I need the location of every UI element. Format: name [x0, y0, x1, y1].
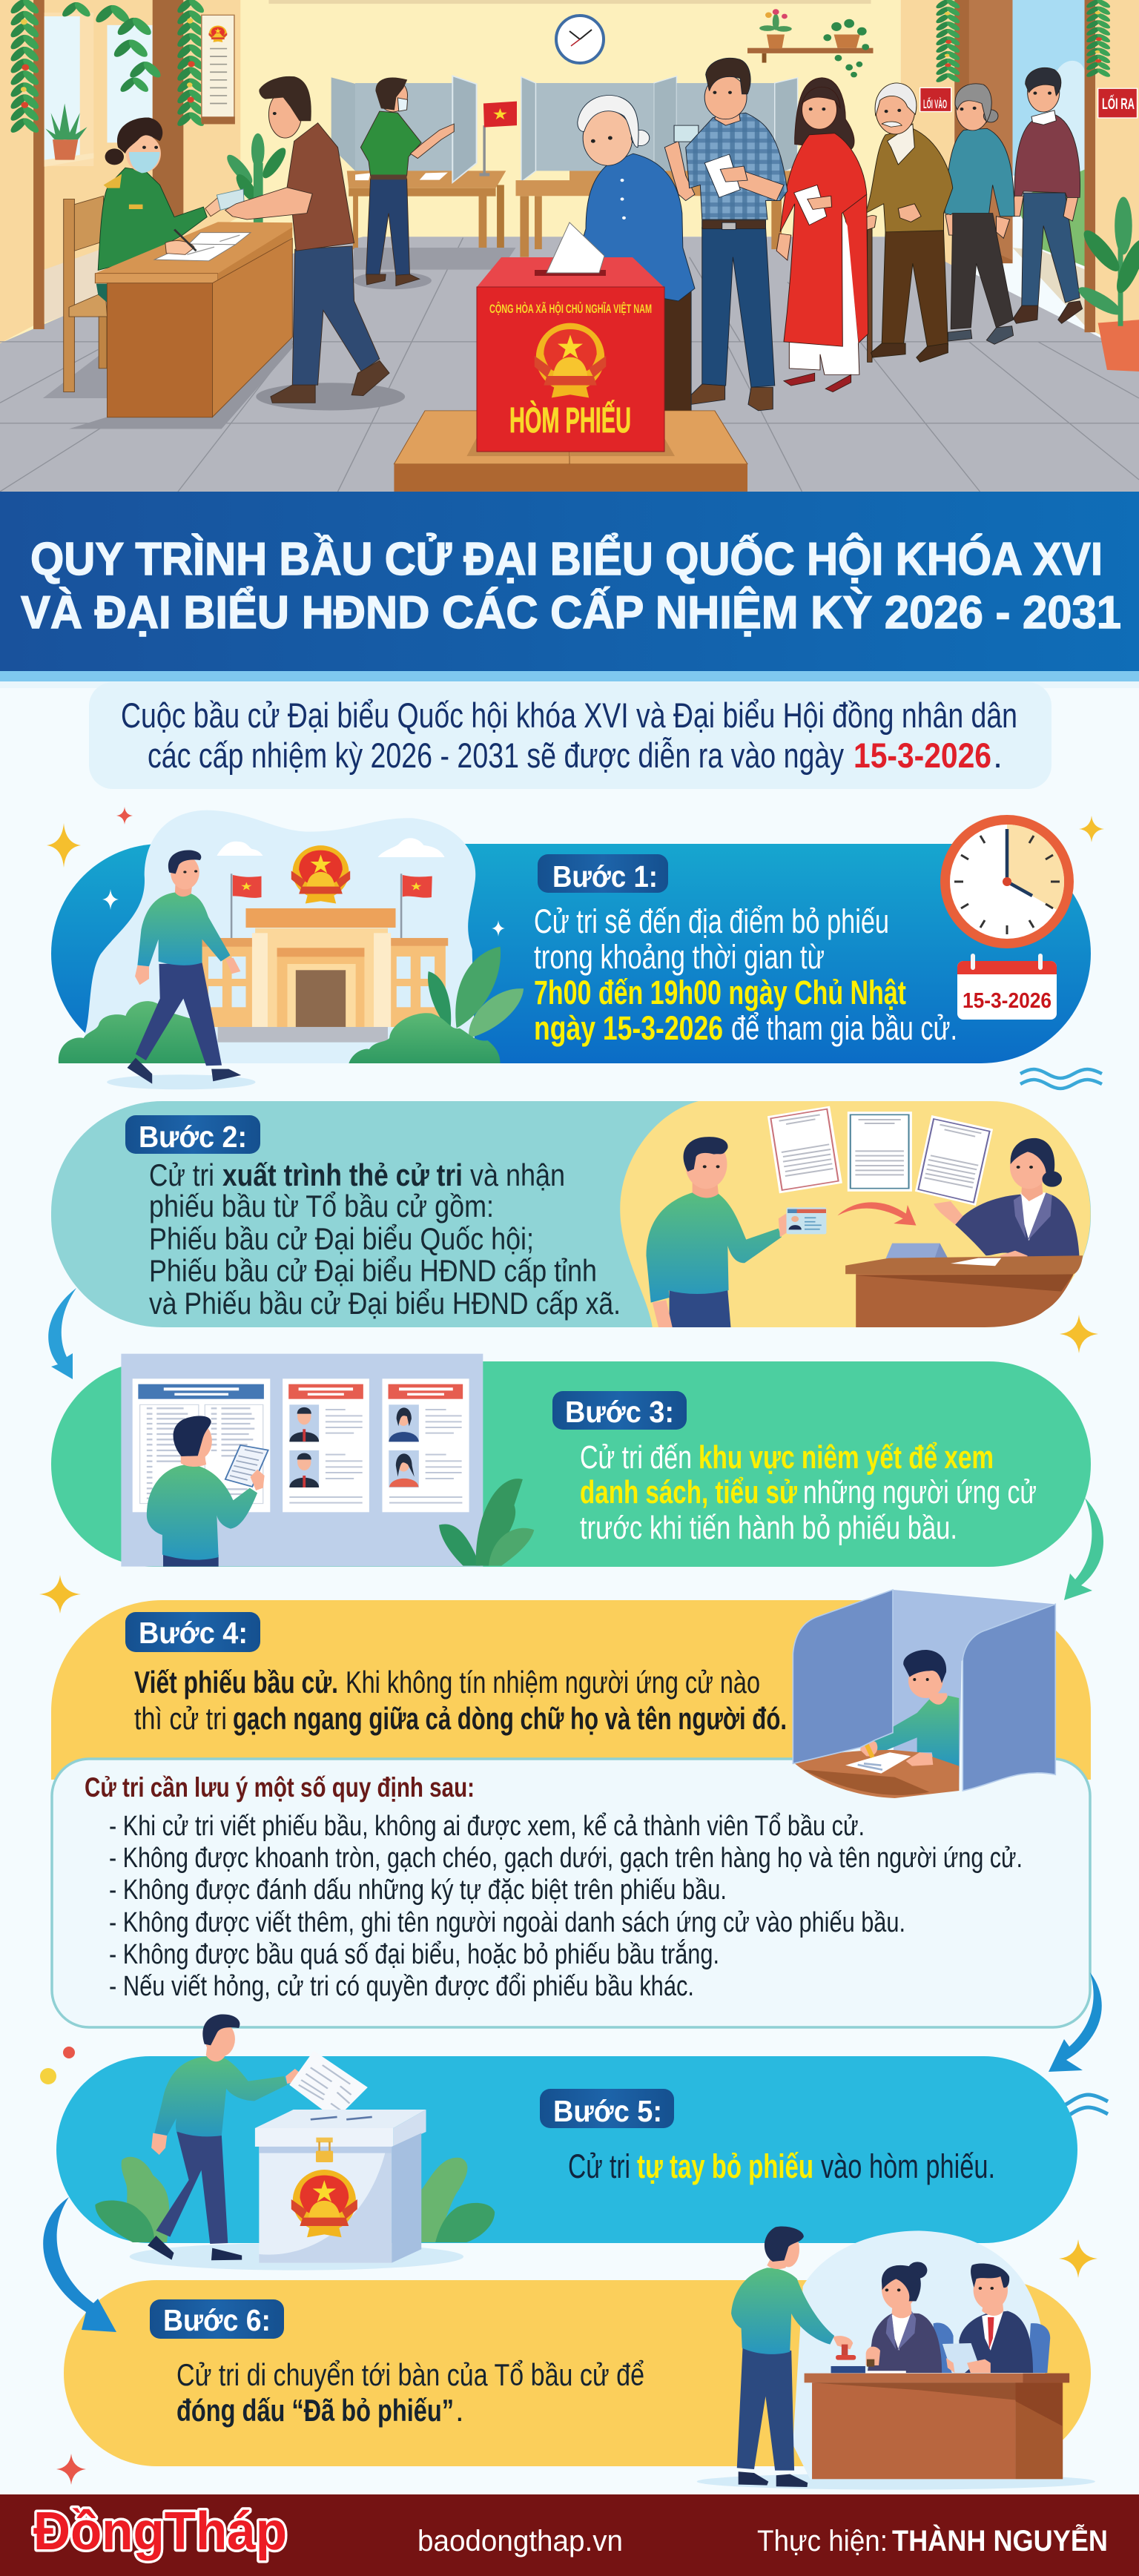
step 1 text — [534, 902, 957, 1047]
notes heading: Cử tri cần lưu ý một số quy định sau: — [85, 1772, 475, 1803]
website: baodongthap.vn — [417, 2525, 623, 2557]
scene right: queue of voters, door and signs — [570, 0, 1139, 492]
step 1 text: Cử tri sẽ đến địa điểm bỏ phiếu — [534, 902, 889, 940]
step 4 text: Viết phiếu bầu cử. — [134, 1665, 338, 1700]
step 3 text: khu vực niêm yết để xem — [699, 1439, 994, 1476]
step 3 text: những người ứng cử — [803, 1474, 1037, 1510]
logo: Dong Thap: ĐồngTháp — [33, 2502, 287, 2561]
arrow: step 4 to step 5 — [1049, 1972, 1102, 2072]
step 1 text: 7h00 đến 19h00 ngày Chủ Nhật — [534, 974, 906, 1011]
step 2 text: Phiếu bầu cử Đại biểu HĐND cấp tỉnh — [149, 1253, 597, 1288]
illustration: voter in booth — [793, 1590, 1055, 1799]
step 4 text: thì cử tri — [134, 1701, 227, 1736]
illustration: voter walking to the polling station — [59, 810, 524, 1089]
notes list: - Không được đánh dấu những ký tự đặc biệt trên phiếu bầu. — [109, 1875, 727, 1906]
step 2 text: phiếu bầu từ Tổ bầu cử gồm: — [149, 1189, 494, 1223]
step 6 text: Cử tri di chuyển tới bàn của Tổ bầu cử để — [176, 2357, 644, 2392]
step 3 text: Cử tri đến — [580, 1439, 692, 1476]
panel: step 6 — [64, 2226, 1095, 2490]
illustration: polling station scene: LỐI VÀO — [923, 96, 947, 111]
panel: step 4 — [51, 1590, 1091, 2027]
step 3 text — [580, 1439, 1037, 1546]
illustration: voter casting ballot — [95, 2014, 495, 2270]
scene: red ballot box: CỘNG HÒA XÃ HỘI CHỦ NGHĨA VIỆT NAM — [489, 301, 652, 316]
step 2 text: Phiếu bầu cử Đại biểu Quốc hội; — [149, 1221, 534, 1256]
arrow: step 2 to step 3 — [48, 1288, 76, 1379]
credit: Thực hiện: — [757, 2525, 888, 2557]
step 5 badge: Bước 5: — [553, 2094, 662, 2128]
step 6 text: . — [455, 2393, 464, 2428]
scene: red ballot box: HÒM PHIẾU — [509, 400, 631, 440]
arrow: step 5 to step 6 — [43, 2197, 116, 2332]
scene: red ballot box — [477, 222, 664, 452]
step 1 badge: Bước 1: — [552, 859, 658, 894]
footer — [0, 2494, 1139, 2576]
step 1 text: để tham gia bầu cử. — [731, 1009, 957, 1047]
decorative sparkles — [39, 807, 1108, 2485]
step 5 text — [568, 2147, 995, 2185]
icon: clock — [940, 815, 1074, 948]
icon: calendar — [957, 954, 1057, 1020]
step 5 text: vào hòm phiếu. — [821, 2147, 995, 2185]
panel: step 1 — [51, 810, 1091, 1089]
illustration: stamping the ballot card — [697, 2226, 1095, 2490]
step 3 text: danh sách, tiểu sử — [580, 1474, 797, 1510]
step 2 text: và nhận — [470, 1157, 565, 1192]
step 2 text — [149, 1157, 621, 1321]
step 1 text: ngày 15-3-2026 — [534, 1009, 723, 1047]
icon: calendar: 15-3-2026 — [963, 989, 1051, 1013]
notes list: - Không được viết thêm, ghi tên người ngoài danh sách ứng cử vào phiếu bầu. — [109, 1907, 905, 1938]
arrow: step 3 to step 4 — [1064, 1498, 1103, 1600]
panel: step 5 — [56, 2014, 1077, 2270]
panel: step 2 — [51, 1101, 1091, 1327]
illustration: voter reading candidate lists — [121, 1354, 534, 1567]
heading line 2: VÀ ĐẠI BIỂU HĐND CÁC CẤP NHIỆM KỲ 2026 - 2031 — [21, 587, 1121, 638]
title banner — [0, 492, 1139, 688]
step 4 text: Khi không tín nhiệm người ứng cử nào — [346, 1665, 760, 1700]
step 4 badge: Bước 4: — [139, 1616, 248, 1650]
step 4 text — [134, 1665, 787, 1736]
illustration: polling station scene — [0, 0, 1139, 492]
notes list: - Khi cử tri viết phiếu bầu, không ai được xem, kể cả thành viên Tổ bầu cử. — [109, 1811, 865, 1842]
notes list: - Không được bầu quá số đại biểu, hoặc bỏ phiếu bầu trắng. — [109, 1938, 719, 1970]
step 5 text: tự tay bỏ phiếu — [637, 2147, 813, 2185]
step 6 badge: Bước 6: — [163, 2303, 271, 2337]
step 6 text: đóng dấu “Đã bỏ phiếu” — [176, 2393, 454, 2428]
intro text panel: 15-3-2026 — [854, 736, 991, 775]
scene: clock on wall — [556, 16, 604, 63]
step 3 text: trước khi tiến hành bỏ phiếu bầu. — [580, 1510, 957, 1546]
step 2 text: xuất trình thẻ cử tri — [222, 1157, 463, 1192]
step 2 text: Cử tri — [149, 1157, 214, 1192]
notes box — [52, 1759, 1090, 2027]
illustration: voter shows card to officer — [620, 1101, 1091, 1327]
step 2 text: và Phiếu bầu cử Đại biểu HĐND cấp xã. — [149, 1286, 621, 1321]
panel: step 3 — [51, 1354, 1091, 1567]
step 4 text: gạch ngang giữa cả dòng chữ họ và tên người đó. — [233, 1701, 787, 1736]
credit — [757, 2523, 1108, 2557]
credit: THÀNH NGUYỄN — [892, 2523, 1108, 2557]
step 3 badge: Bước 3: — [565, 1395, 674, 1429]
intro text panel: các cấp nhiệm kỳ 2026 - 2031 sẽ được diễn ra vào ngày — [148, 736, 844, 775]
step 5 text: Cử tri — [568, 2147, 630, 2185]
intro text panel — [89, 682, 1051, 789]
step 2 badge: Bước 2: — [139, 1120, 247, 1154]
step 6 text — [176, 2357, 644, 2428]
notes list — [109, 1811, 1023, 2002]
scene left: wall, table, officer and voter — [0, 0, 570, 492]
intro text panel: . — [993, 736, 1003, 775]
notes list: - Nếu viết hỏng, cử tri có quyền được đổi phiếu bầu khác. — [109, 1971, 694, 2002]
heading line 1: QUY TRÌNH BẦU CỬ ĐẠI BIỂU QUỐC HỘI KHÓA XVI — [30, 534, 1103, 585]
step 1 text: trong khoảng thời gian từ — [534, 938, 825, 976]
